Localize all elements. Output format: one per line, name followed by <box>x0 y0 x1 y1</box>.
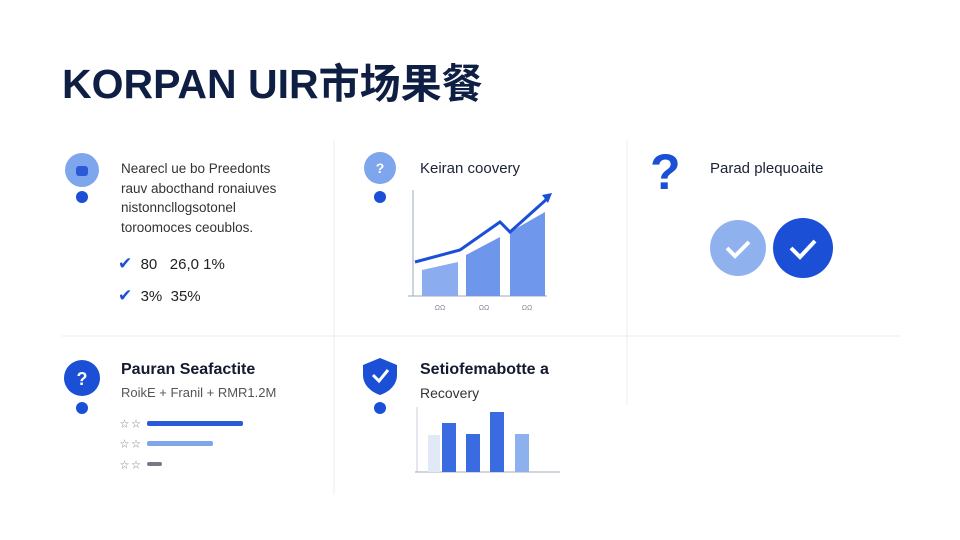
panel: checks <box>650 144 833 278</box>
stats: ✔ 80 26,0 1% <box>118 254 225 273</box>
text block: Nearecl ue bo Preedonts rauv abocthand ronaiuves nistonncllogsotonel toroomoces ceoublos. <box>121 161 276 234</box>
icon: shield <box>363 358 397 414</box>
panel: recovery line chart <box>364 152 552 312</box>
bars: ☆ ☆ <box>120 439 141 449</box>
chart <box>408 190 552 312</box>
icon: check circles <box>710 218 833 278</box>
heading: Setiofemabotte a <box>420 361 549 378</box>
stats: ✔ 3% 35% <box>118 286 201 305</box>
panel: bar list <box>64 360 276 470</box>
icon: question mark: ? <box>650 144 681 200</box>
chart: ΩΩ <box>522 305 532 312</box>
panel: recovery bar chart <box>363 358 560 472</box>
bars: ☆ ☆ <box>120 460 141 470</box>
chart: ΩΩ <box>479 305 489 312</box>
subtitle: Recovery <box>420 385 479 401</box>
heading: Keiran coovery <box>420 160 520 177</box>
chart: ΩΩ <box>435 305 445 312</box>
bars <box>120 419 243 470</box>
heading: Pauran Seafactite <box>121 361 255 378</box>
title: KORPAN UIR市场果餐 <box>62 61 483 107</box>
heading: Parad plequoaite <box>710 160 823 177</box>
panel: intro text <box>65 153 276 305</box>
icon <box>364 152 396 203</box>
icon: info circle <box>65 153 99 203</box>
icon: ? <box>376 160 384 176</box>
chart <box>415 407 560 472</box>
stats <box>118 254 225 305</box>
icon: ? <box>76 369 88 389</box>
bars: ☆ ☆ <box>120 419 141 429</box>
icon <box>64 360 100 414</box>
subtitle: RoikE + Franil + RMR1.2M <box>121 385 276 400</box>
